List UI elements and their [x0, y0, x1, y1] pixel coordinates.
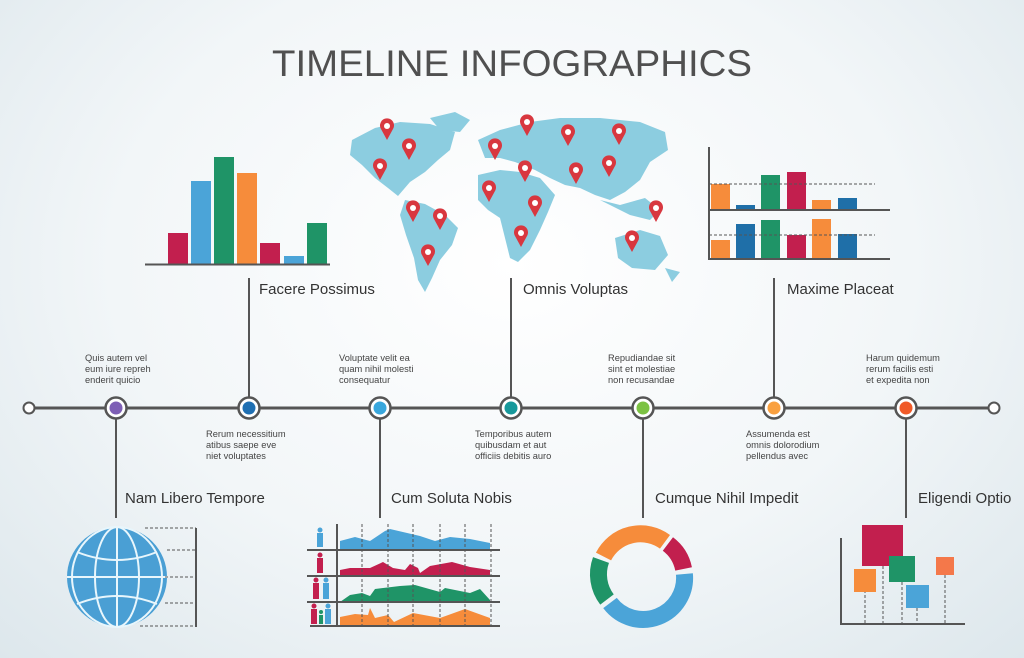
headings — [125, 281, 1011, 507]
small text blocks: officiis debitis auro — [475, 451, 551, 461]
small text blocks: atibus saepe eve — [206, 440, 276, 450]
headings: Omnis Voluptas — [523, 281, 628, 298]
small text blocks: pellendus avec — [746, 451, 808, 461]
small text blocks: quibusdam et aut — [475, 440, 547, 450]
area chart with people — [307, 524, 500, 626]
headings: Cumque Nihil Impedit — [655, 490, 799, 507]
small text blocks: Voluptate velit ea — [339, 353, 411, 363]
small text blocks: sint et molestiae — [608, 364, 675, 374]
small text blocks: eum iure repreh — [85, 364, 151, 374]
bubble/square chart — [840, 525, 965, 625]
world map with pins — [350, 112, 680, 292]
small text blocks: Repudiandae sit — [608, 353, 676, 363]
small text blocks: Rerum necessitium — [206, 429, 286, 439]
small text blocks: omnis dolorodium — [746, 440, 820, 450]
small text blocks: Harum quidemum — [866, 353, 940, 363]
small text blocks: Quis autem vel — [85, 353, 147, 363]
small text blocks: consequatur — [339, 375, 390, 385]
title: TIMELINE INFOGRAPHICS — [272, 43, 752, 84]
headings: Eligendi Optio — [918, 490, 1011, 507]
small text blocks: non recusandae — [608, 375, 675, 385]
bar chart: top left — [145, 157, 330, 264]
small text blocks: Assumenda est — [746, 429, 810, 439]
donut chart — [598, 534, 685, 619]
small text blocks: et expedita non — [866, 375, 930, 385]
timeline nodes — [106, 398, 916, 418]
icon: globe — [67, 527, 196, 627]
headings: Maxime Placeat — [787, 281, 895, 298]
small text blocks — [85, 353, 940, 461]
timeline connectors — [116, 278, 906, 518]
headings: Cum Soluta Nobis — [391, 490, 512, 507]
headings: Facere Possimus — [259, 281, 375, 298]
small text blocks: enderit quicio — [85, 375, 140, 385]
small text blocks: niet voluptates — [206, 451, 266, 461]
timeline axis — [24, 402, 1000, 414]
small text blocks: rerum facilis esti — [866, 364, 933, 374]
headings: Nam Libero Tempore — [125, 490, 265, 507]
bar chart: top right — [709, 147, 890, 260]
small text blocks: Temporibus autem — [475, 429, 552, 439]
small text blocks: quam nihil molesti — [339, 364, 413, 374]
